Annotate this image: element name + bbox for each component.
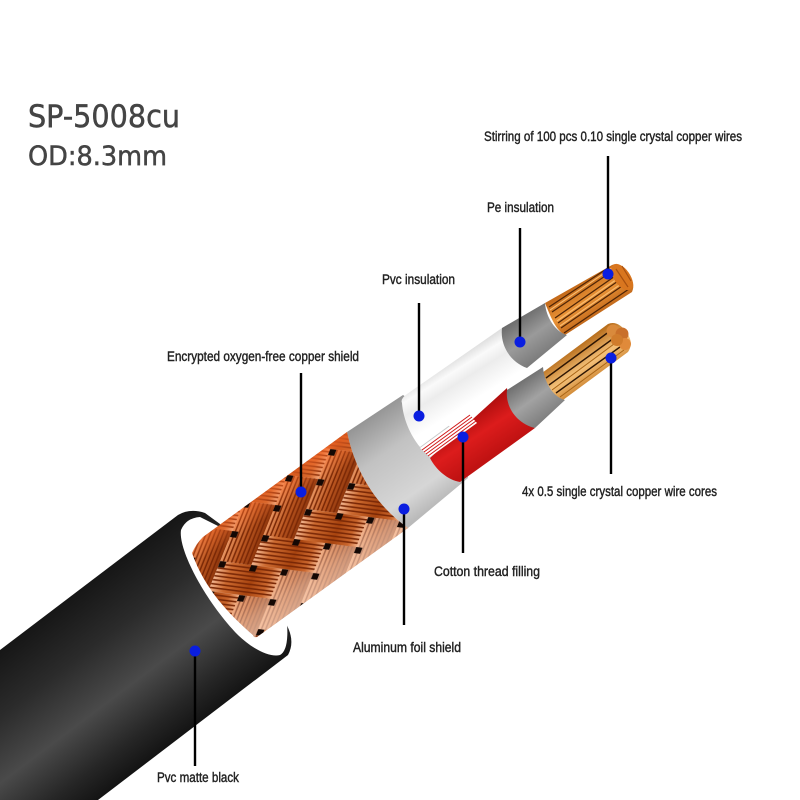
callout: aluminum foil shield [353, 504, 461, 655]
aluminum foil shield [347, 395, 470, 528]
callout: aluminum foil shield: Aluminum foil shield [353, 640, 461, 655]
callout: stirring of copper wires [484, 129, 742, 280]
callout: PVC matte black: Pvc matte black [157, 770, 239, 785]
red cotton-filled core [430, 388, 535, 482]
lower grey PE insulation [507, 367, 565, 428]
cable illustration [0, 260, 637, 800]
title: model and outer diameter [28, 99, 180, 172]
callout: copper shield [167, 349, 359, 498]
lower copper strands [542, 323, 631, 400]
callout: wire cores: 4x 0.5 single crystal copper wire cores [522, 484, 717, 499]
callout: PVC insulation [382, 272, 455, 422]
callout: PE insulation [487, 200, 554, 348]
callout: cotton thread filling [434, 432, 540, 579]
model name: SP-5008cu [28, 99, 180, 135]
cotton thread filling stripes [420, 413, 477, 457]
callout: copper shield: Encrypted oxygen-free copper shield [167, 349, 359, 364]
callout: wire cores [522, 352, 717, 499]
callout: PVC insulation: Pvc insulation [382, 272, 455, 287]
callout: stirring of copper wires: Stirring of 100 pcs 0.10 single crystal copper wires [484, 129, 742, 144]
white PVC insulated core [402, 328, 530, 447]
upper copper strands [545, 260, 637, 335]
outer diameter: OD:8.3mm [28, 141, 167, 172]
callout: PE insulation: Pe insulation [487, 200, 554, 215]
encrypted oxygen-free copper braid shield [192, 432, 408, 637]
upper grey PE insulation [502, 303, 567, 368]
callout: PVC matte black [157, 646, 239, 785]
callout: cotton thread filling: Cotton thread filling [434, 564, 540, 579]
outer PVC matte black jacket [0, 511, 291, 800]
